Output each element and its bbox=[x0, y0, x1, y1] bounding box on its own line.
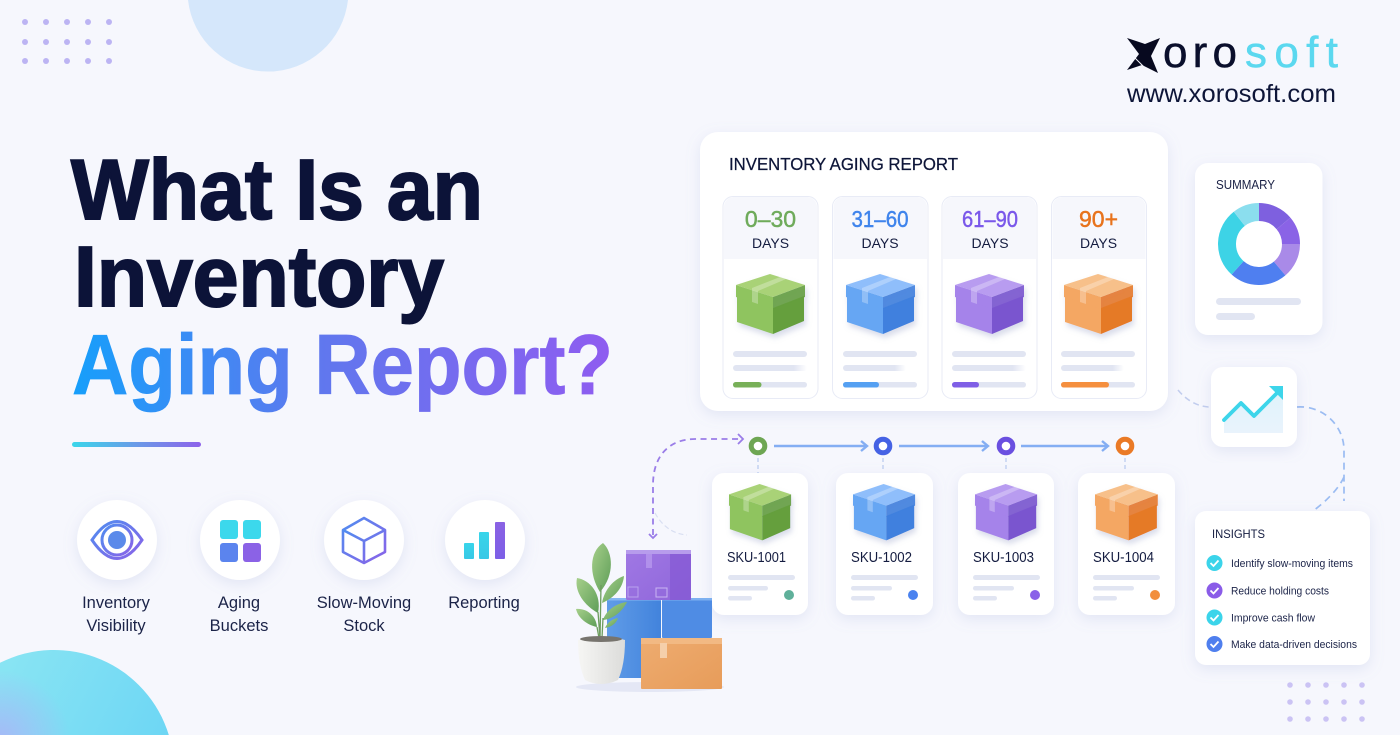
panel: inventory aging report bbox=[700, 132, 1168, 411]
logo wordmark bbox=[1163, 28, 1338, 77]
bucket: 0-30 days bbox=[723, 196, 818, 398]
nodes bbox=[751, 439, 1132, 453]
bucket: 61-90 days bbox=[942, 196, 1037, 398]
title: What Is an bbox=[71, 143, 483, 238]
bucket: 61-90 days: DAYS bbox=[971, 235, 1009, 251]
title bbox=[71, 143, 613, 413]
bucket: 90+ days: 90+ bbox=[1079, 206, 1118, 232]
insight: data-driven decisions: Make data-driven decisions bbox=[1231, 639, 1357, 651]
label: Aging bbox=[218, 594, 260, 612]
trend arrow bbox=[1224, 390, 1280, 420]
feature: slow-moving stock bbox=[317, 500, 411, 635]
card: SKU-1002 bbox=[836, 473, 933, 615]
timeline bbox=[751, 439, 1132, 473]
decorative circle: bottom left bbox=[0, 650, 169, 735]
orange box bbox=[641, 638, 722, 689]
insight: slow-moving items: Identify slow-moving items bbox=[1231, 558, 1353, 570]
label: Stock bbox=[343, 617, 385, 635]
box bbox=[1095, 484, 1158, 540]
icon: eye bbox=[92, 522, 142, 558]
label: Slow-Moving bbox=[317, 594, 411, 612]
label: Buckets bbox=[210, 617, 268, 635]
summary heading: SUMMARY bbox=[1216, 178, 1276, 192]
card: SKU-1003 bbox=[958, 473, 1054, 615]
donut chart bbox=[1227, 212, 1291, 276]
insights heading: INSIGHTS bbox=[1212, 527, 1265, 541]
website: www.xorosoft.com bbox=[1126, 80, 1336, 108]
illustration: box stack and plant bbox=[576, 543, 724, 692]
connector: report to trend bbox=[1178, 390, 1210, 407]
purple box bbox=[626, 550, 691, 600]
bucket: 31-60 days bbox=[832, 196, 928, 398]
logo wordmark: oro bbox=[1163, 28, 1237, 77]
insight: holding costs bbox=[1206, 582, 1329, 598]
insight: data-driven decisions bbox=[1206, 636, 1357, 652]
label: Visibility bbox=[86, 617, 146, 635]
icon: cube bbox=[343, 518, 385, 563]
connector: trend to insights bbox=[1297, 407, 1344, 511]
plant pot bbox=[578, 636, 625, 684]
box bbox=[975, 484, 1037, 540]
plant leaves bbox=[576, 543, 627, 640]
bucket: 0-30 days: 0–30 bbox=[745, 206, 796, 232]
blue box right bbox=[662, 598, 712, 638]
label bbox=[82, 594, 151, 635]
node connectors bbox=[758, 458, 1125, 473]
insight: cash flow bbox=[1206, 610, 1315, 626]
box bbox=[729, 484, 791, 540]
logo wordmark: soft bbox=[1245, 28, 1338, 77]
feature: aging buckets bbox=[200, 500, 280, 635]
feature: reporting bbox=[445, 500, 525, 612]
panel: insights bbox=[1195, 511, 1370, 665]
card: SKU-1001 bbox=[712, 473, 808, 615]
label bbox=[210, 594, 268, 635]
card: SKU-1001: SKU-1001 bbox=[727, 550, 786, 566]
dot grid: top left bbox=[22, 19, 112, 64]
label: Reporting bbox=[448, 594, 520, 612]
panel: summary bbox=[1195, 163, 1322, 335]
bucket: 31-60 days: 31–60 bbox=[852, 206, 908, 232]
card: SKU-1003: SKU-1003 bbox=[973, 550, 1034, 566]
feature: inventory visibility bbox=[77, 500, 157, 635]
insight: slow-moving items bbox=[1206, 555, 1353, 571]
icon: grid bbox=[220, 520, 261, 562]
trend area bbox=[1224, 390, 1283, 433]
card: SKU-1002: SKU-1002 bbox=[851, 550, 912, 566]
label: Inventory bbox=[82, 594, 151, 612]
title: Aging Report? bbox=[72, 318, 613, 413]
bucket: 61-90 days: 61–90 bbox=[962, 206, 1018, 232]
flow arrows bbox=[774, 441, 1108, 451]
title underline bbox=[72, 442, 201, 447]
card: trend chart bbox=[1211, 367, 1297, 447]
bucket: 31-60 days: DAYS bbox=[861, 235, 899, 251]
box bbox=[1064, 274, 1133, 334]
dot grid: bottom right bbox=[1287, 682, 1365, 722]
logo mark bbox=[1127, 38, 1160, 73]
insight: cash flow: Improve cash flow bbox=[1231, 612, 1315, 624]
card: SKU-1004 bbox=[1078, 473, 1175, 615]
bucket: 90+ days: DAYS bbox=[1080, 235, 1117, 251]
blue box left bbox=[607, 598, 661, 678]
box bbox=[736, 274, 805, 334]
box bbox=[955, 274, 1024, 334]
connector: stack to first node bbox=[649, 434, 743, 538]
insight: holding costs: Reduce holding costs bbox=[1231, 586, 1329, 598]
box bbox=[846, 274, 915, 334]
bucket: 0-30 days: DAYS bbox=[752, 235, 789, 251]
box bbox=[853, 484, 915, 540]
decorative circle: top bbox=[188, 0, 348, 72]
bucket: 90+ days bbox=[1052, 196, 1146, 398]
icon: bars bbox=[464, 522, 505, 559]
label bbox=[317, 594, 411, 635]
logo bbox=[1126, 28, 1338, 108]
title: Inventory bbox=[74, 230, 444, 325]
panel heading: INVENTORY AGING REPORT bbox=[729, 154, 958, 174]
card: SKU-1004: SKU-1004 bbox=[1093, 550, 1154, 566]
